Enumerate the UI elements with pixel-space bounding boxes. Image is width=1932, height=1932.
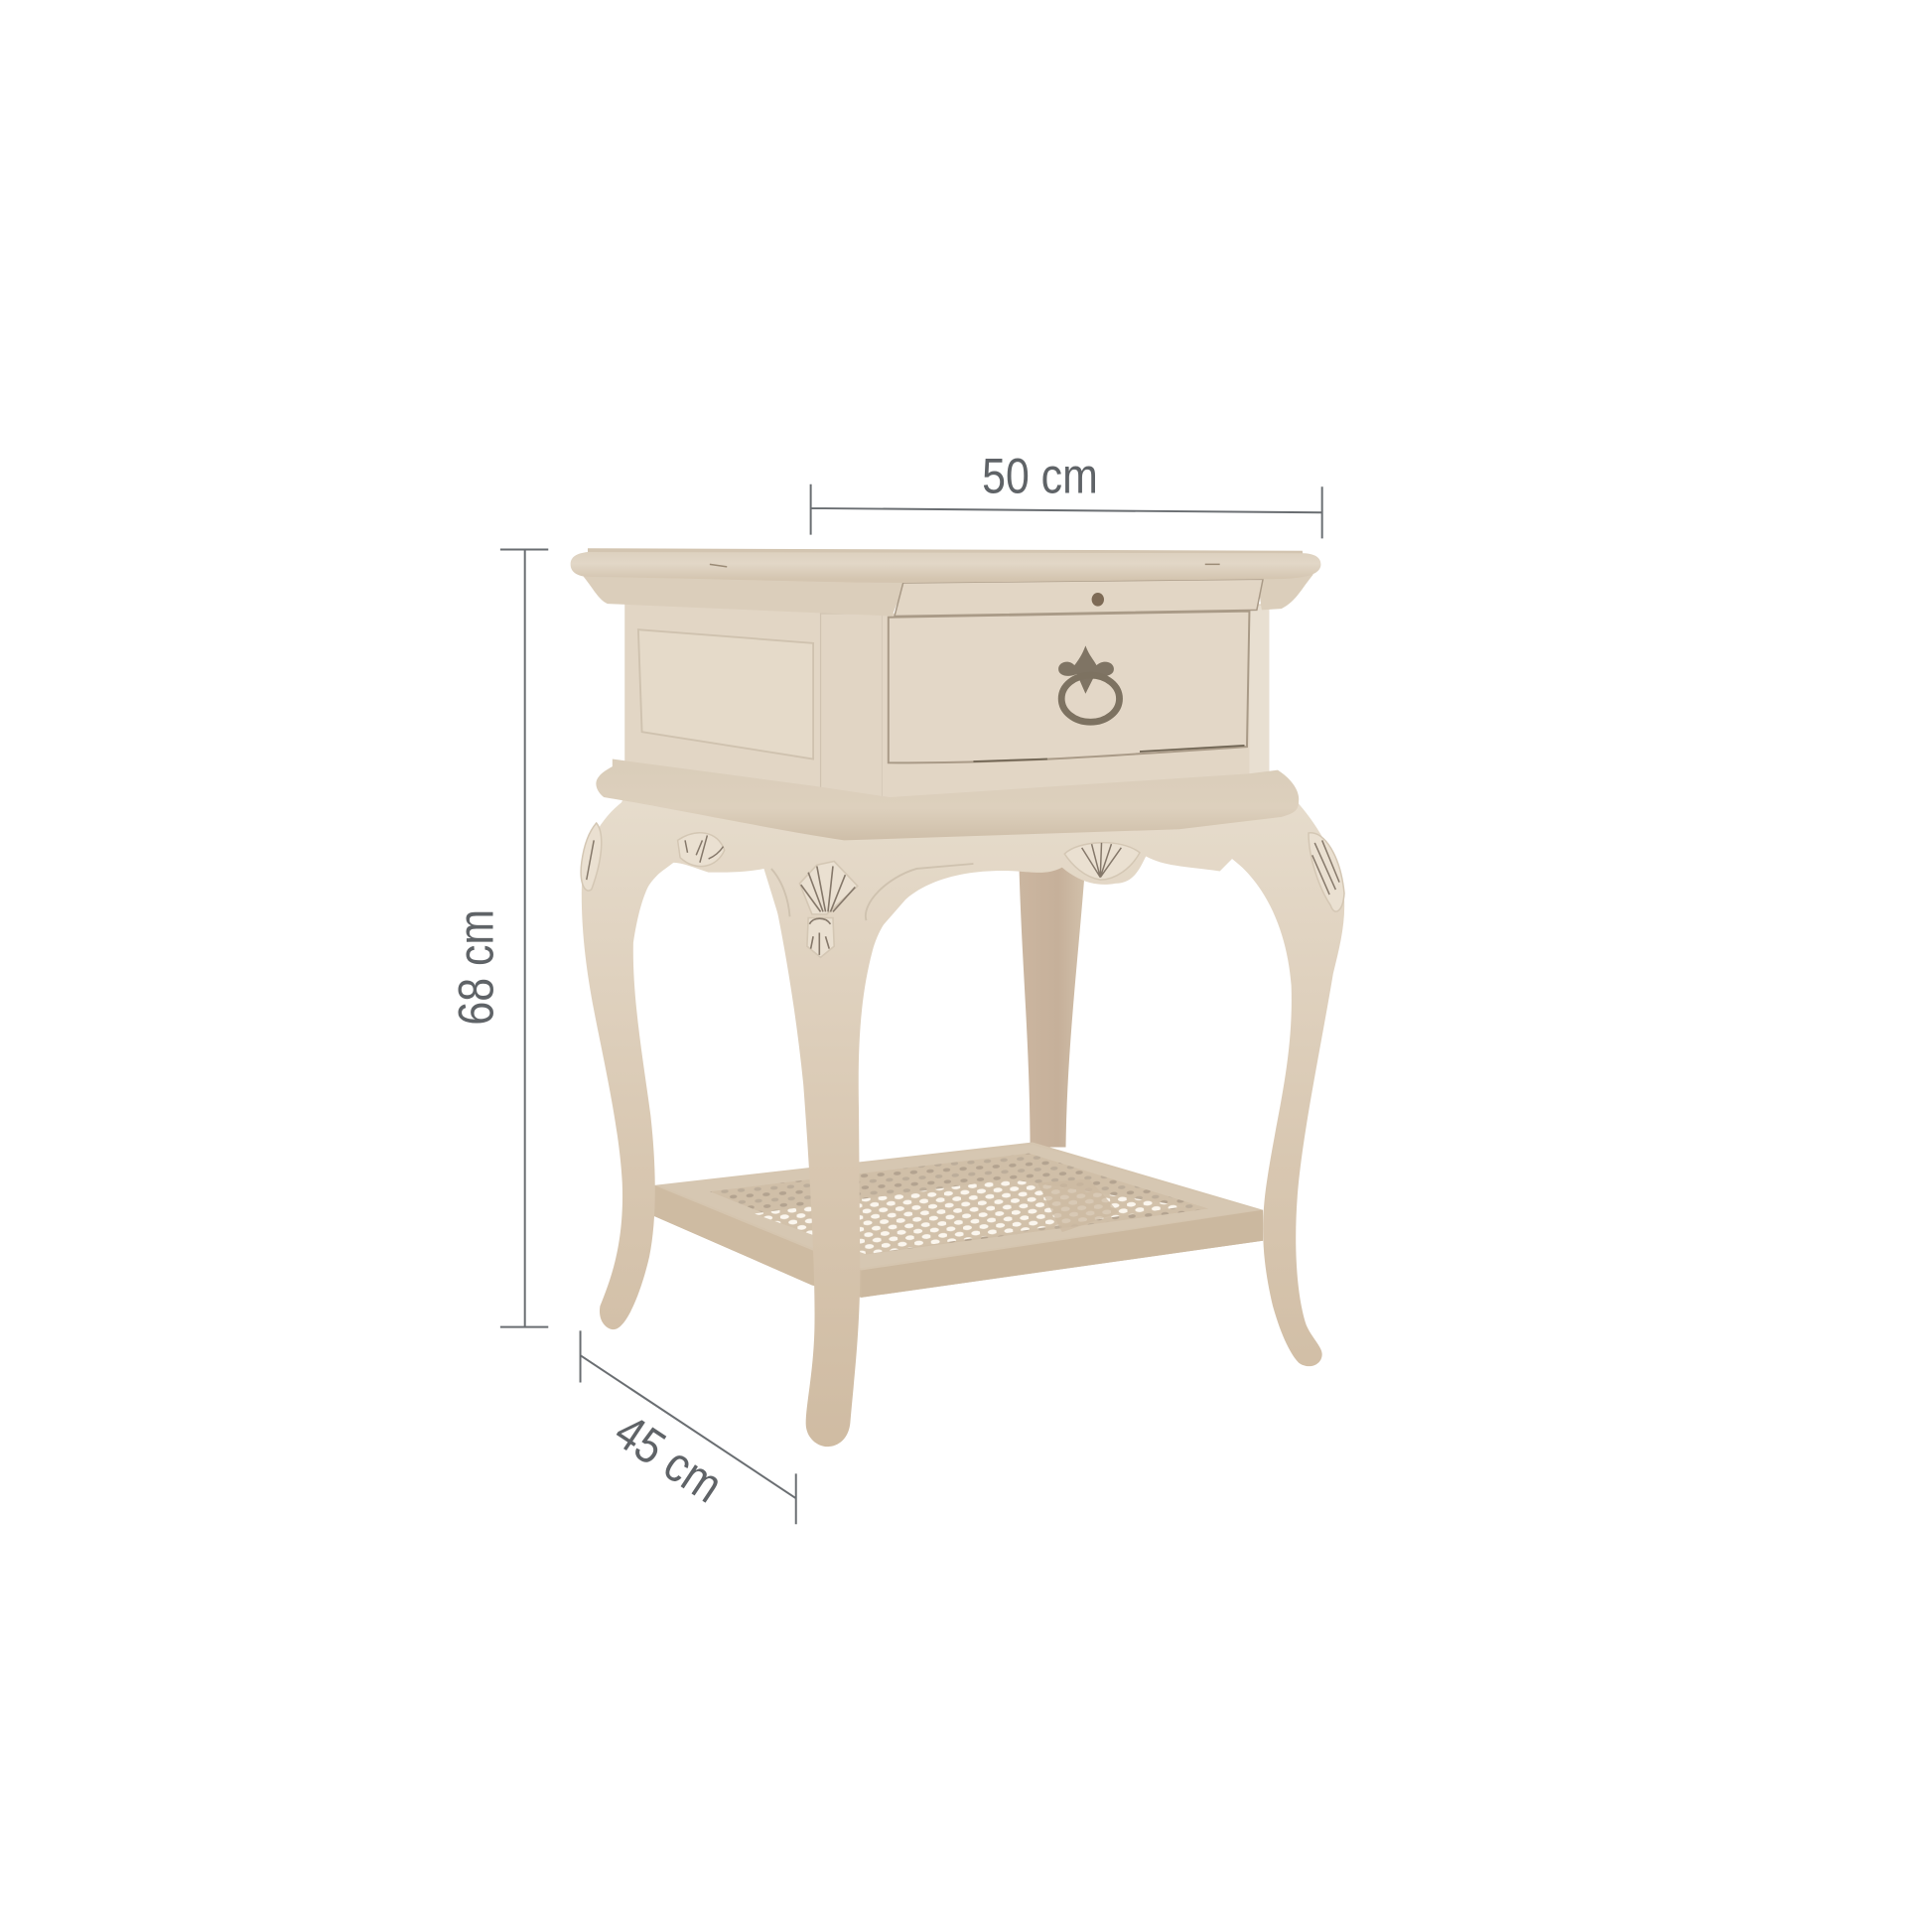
dimension: width 50 cm	[811, 448, 1322, 538]
back right leg	[1019, 863, 1085, 1147]
shelf side edge	[654, 1185, 862, 1298]
apron bead left	[771, 869, 790, 916]
top moulding	[571, 552, 1320, 583]
carving: side apron shell	[678, 833, 725, 867]
table illustration	[571, 548, 1344, 1447]
lower shelf	[654, 1142, 1263, 1298]
ring	[1061, 675, 1120, 722]
shelf frame	[654, 1142, 1263, 1298]
depth label: 45 cm	[606, 1403, 733, 1513]
front centre leg	[766, 838, 936, 1447]
cornice right	[1257, 574, 1313, 610]
front right leg	[1232, 801, 1344, 1366]
cornice left	[582, 574, 905, 617]
top surface sliver	[588, 548, 1304, 559]
side panel	[624, 604, 883, 801]
width label: 50 cm	[982, 448, 1098, 503]
carving: right leg shell	[1309, 833, 1344, 911]
cane lattice, bright part	[755, 1179, 1185, 1254]
height line	[500, 550, 548, 1327]
apron bead right	[866, 864, 973, 920]
front panel	[883, 604, 1269, 807]
carving: left leg shell	[581, 823, 602, 891]
side panel inset	[638, 629, 813, 759]
carving: front apron shell	[1064, 843, 1140, 880]
shell fan	[799, 862, 858, 914]
shelf top surface	[659, 1145, 1258, 1268]
base moulding	[596, 759, 1299, 840]
dimension: depth 45 cm	[581, 1330, 796, 1524]
apron	[604, 794, 1309, 949]
cane reflection	[1037, 1179, 1119, 1232]
cane lattice, rear shaded part	[710, 1154, 1208, 1254]
drawer front	[889, 612, 1249, 762]
slide knob	[1092, 593, 1104, 607]
depth line	[581, 1330, 796, 1524]
slide-out panel	[895, 579, 1263, 617]
cabinet body	[571, 548, 1320, 840]
dimension: height 68 cm	[448, 550, 548, 1327]
back left leg	[582, 801, 690, 1329]
right post highlight	[1249, 605, 1269, 790]
backplate	[1058, 645, 1114, 694]
width line	[811, 484, 1322, 538]
height label: 68 cm	[448, 909, 503, 1026]
carving: corner shell on front leg	[771, 862, 973, 957]
corner post	[821, 614, 883, 801]
drawer wear marks	[973, 746, 1244, 761]
shelf front edge	[862, 1210, 1263, 1298]
drawer ring handle	[1058, 645, 1120, 722]
top wear marks	[710, 564, 1220, 567]
lower palmette	[807, 918, 834, 957]
